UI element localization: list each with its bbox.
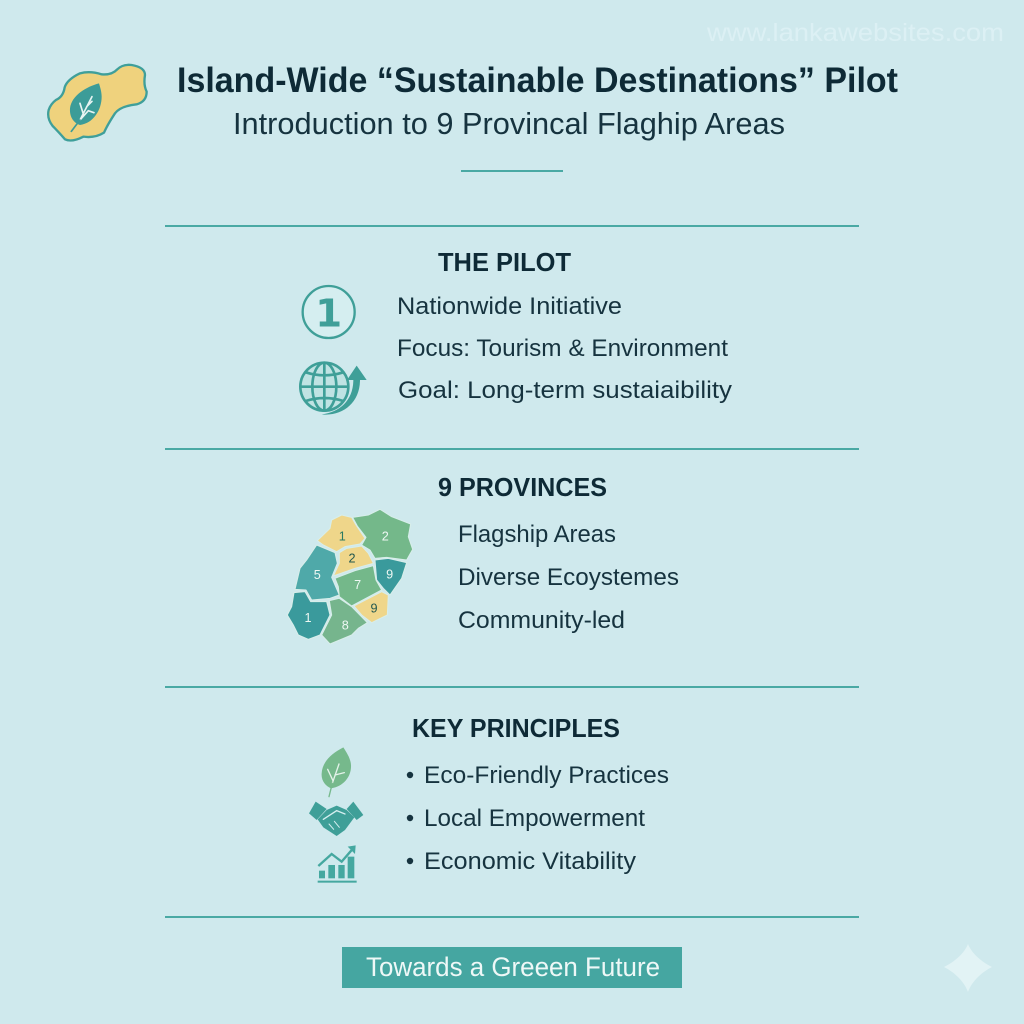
text: goal: Goal: Long-term sustaiaibility (398, 377, 733, 404)
icon: number one in circle: 1 (315, 292, 342, 337)
icon: number one in circle (303, 286, 355, 338)
map: nine numbered provinces (287, 509, 413, 644)
icon: handshake (309, 802, 363, 836)
map: nine numbered provinces: 1 (339, 529, 346, 543)
heading: 9 provinces: 9 PROVINCES (438, 472, 607, 502)
text: community-led: Community-led (458, 607, 625, 634)
text: flagship areas: Flagship Areas (458, 521, 616, 548)
map: nine numbered provinces: 9 (370, 601, 378, 615)
title: Island-Wide “Sustainable Destinations” Pilot (177, 61, 898, 100)
map: nine numbered provinces: 7 (354, 578, 361, 592)
title underline (461, 170, 563, 172)
map: nine numbered provinces: 2 (382, 529, 389, 543)
text: nationwide initiative: Nationwide Initiative (397, 293, 622, 320)
panel: key principles (309, 713, 669, 883)
heading: key principles: KEY PRINCIPLES (412, 713, 620, 743)
map: nine numbered provinces: 2 (348, 551, 356, 565)
bullet list: principles (407, 762, 669, 875)
banner: towards a green future: Towards a Greeen Future (366, 952, 660, 982)
icon: globe with rising arrow (300, 363, 367, 415)
heading: the pilot: THE PILOT (438, 247, 571, 277)
bullet list: principles: Eco-Friendly Practices (424, 762, 669, 789)
panel: the pilot (300, 247, 733, 415)
panel: 9 provinces (287, 472, 679, 644)
map: nine numbered provinces: 9 (386, 568, 393, 582)
icon: growth bar chart (318, 845, 357, 883)
bullet list: principles: Local Empowerment (424, 805, 645, 832)
text: diverse ecosystems: Diverse Ecoystemes (458, 564, 679, 591)
text: focus: Focus: Tourism & Environment (397, 335, 728, 362)
banner: towards a green future (342, 947, 682, 988)
icon: green leaf (322, 747, 351, 797)
map: nine numbered provinces: 1 (304, 611, 312, 625)
bullet list: principles: Economic Vitability (424, 848, 637, 875)
map: nine numbered provinces: 5 (314, 568, 321, 582)
map: nine numbered provinces: 8 (342, 618, 349, 632)
icon: island logo with leaf (48, 65, 147, 141)
watermark: website address: www.lankawebsites.com (706, 19, 1004, 47)
subtitle: Introduction to 9 Provincal Flaghip Areas (233, 107, 785, 141)
icon: sparkle (944, 944, 992, 992)
